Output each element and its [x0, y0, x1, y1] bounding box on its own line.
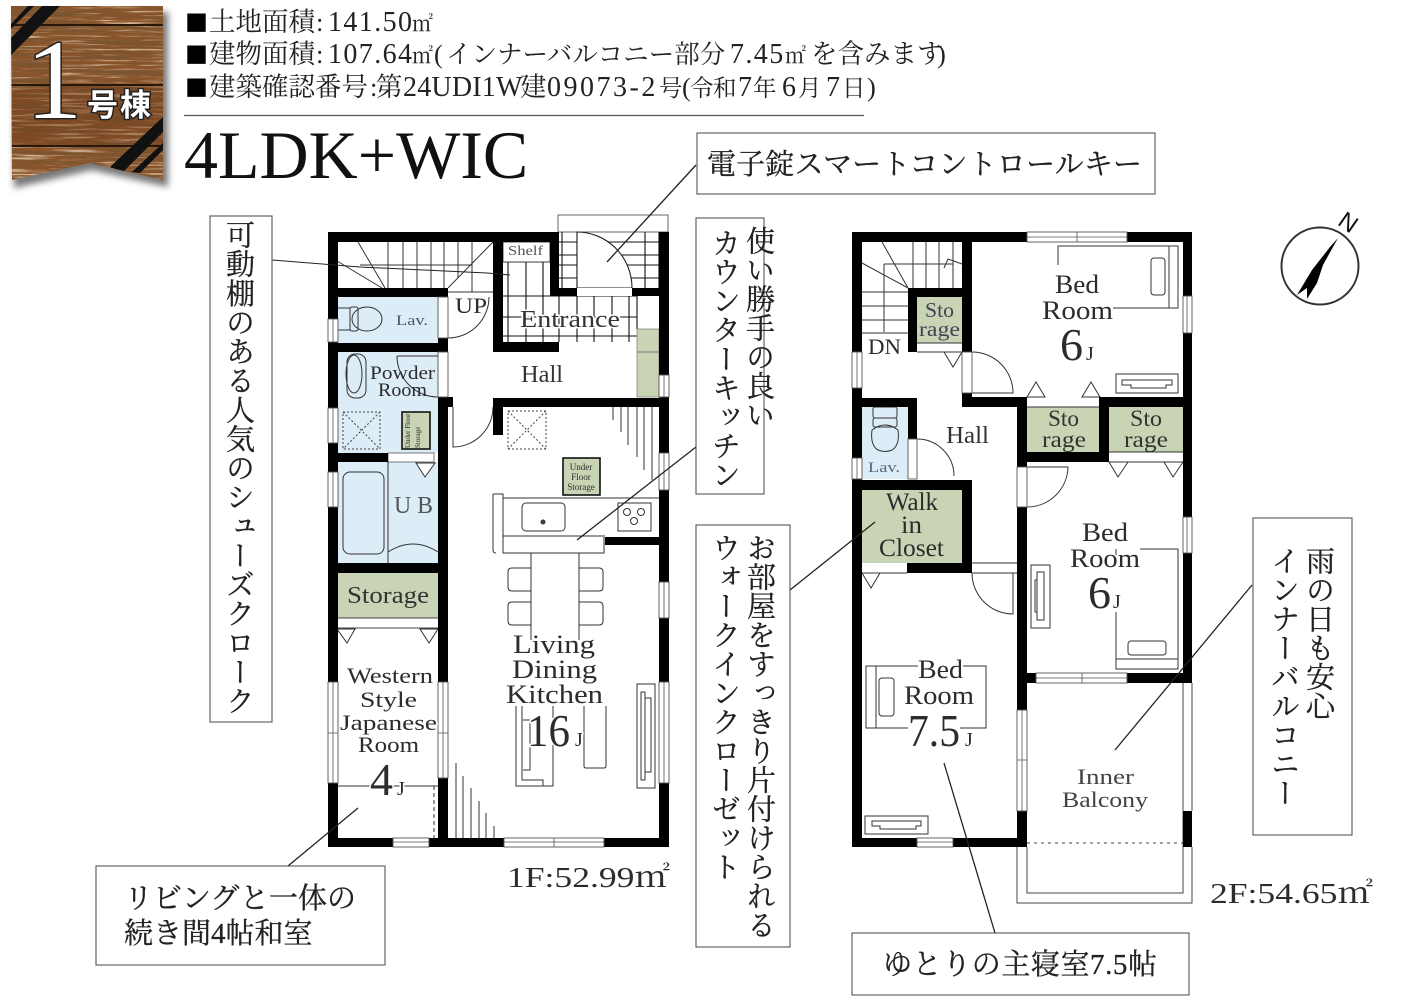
callout: smart key — [697, 133, 1155, 194]
room labels 2F — [868, 270, 1168, 812]
property facts: 令 — [690, 75, 714, 102]
room labels 2F: rage — [919, 317, 960, 341]
property facts: : — [316, 7, 323, 37]
room labels 1F: Dining — [512, 655, 597, 684]
callout: walk-in closet — [696, 525, 790, 947]
room labels 2F: Sto — [925, 298, 954, 322]
room labels 2F: 6 — [1088, 567, 1111, 618]
property facts: を含みます — [811, 39, 944, 69]
floor area: 2F: 2F:54.65㎡ — [1210, 878, 1373, 910]
callout: counter kitchen: カウンターキッチン — [708, 228, 740, 489]
beds and tvs — [865, 246, 1178, 834]
windows — [852, 232, 1192, 847]
room labels 2F: Room — [1042, 296, 1113, 325]
property facts: : — [370, 72, 377, 102]
property facts: 7.45 — [730, 39, 785, 70]
sofa, table, tv — [516, 684, 655, 788]
room labels 2F: Balcony — [1062, 787, 1148, 812]
room labels 2F: Room — [904, 681, 974, 710]
room labels 2F: rage — [1042, 427, 1086, 452]
room labels 2F: Inner — [1077, 764, 1135, 789]
room labels 2F: J — [1113, 591, 1121, 613]
room labels 2F: J — [965, 729, 973, 751]
property facts: 第 — [376, 72, 402, 102]
property facts: 141.50 — [328, 7, 413, 38]
windows — [328, 297, 669, 847]
doors and closets — [862, 343, 1183, 614]
room labels 2F: Bed — [1055, 270, 1099, 299]
property facts: ㎡ — [412, 44, 433, 68]
room labels 1F: Room — [358, 732, 419, 757]
balcony railing — [1017, 683, 1192, 903]
callout: tatami room: リビングと一体の — [124, 882, 356, 915]
room labels 1F: J — [575, 729, 583, 751]
property facts: 6 — [782, 72, 797, 103]
room labels 2F: 6 — [1060, 319, 1083, 370]
property facts: ■ — [185, 70, 208, 103]
room labels 1F: Hall — [521, 362, 563, 388]
porch and entrance tile — [503, 215, 668, 342]
callout: walk-in closet: ウォークインクローゼット — [708, 533, 740, 881]
badge numeral: 1 — [26, 18, 82, 143]
callout: master bedroom — [852, 933, 1189, 995]
leader lines — [272, 165, 1252, 933]
room labels 1F: Powder — [370, 363, 436, 384]
room labels 2F: Lav. — [868, 460, 900, 476]
callout: walk-in closet: お部屋をすっきり片付けられる — [743, 533, 776, 939]
floor area: 1F: 1F:52.99㎡ — [507, 862, 670, 894]
room labels 2F: Walk — [886, 489, 938, 516]
room labels 2F: rage — [1124, 427, 1168, 452]
room labels 2F: in — [901, 512, 923, 539]
under floor storage: Floor — [571, 472, 591, 482]
badge label: 号棟 — [87, 88, 151, 123]
room labels 1F: Kitchen — [506, 680, 603, 709]
callout: inner balcony: インナーバルコニー — [1267, 546, 1299, 807]
property facts: 7 — [826, 72, 841, 103]
property facts: ㎡ — [412, 12, 433, 36]
under floor storage: Under — [570, 462, 592, 472]
room labels 1F: Room — [378, 380, 427, 401]
room labels 2F: J — [1086, 343, 1094, 365]
toilet — [872, 407, 898, 452]
callout: tatami room — [96, 866, 385, 965]
property facts: 土地面積 — [209, 7, 317, 37]
callout: inner balcony: 雨の日も安心 — [1302, 546, 1334, 720]
room labels 2F: Closet — [879, 535, 944, 562]
stairs — [862, 242, 962, 333]
room labels 1F: Style — [360, 687, 417, 712]
room labels 2F: 7.5 — [908, 705, 960, 756]
kitchen counter — [493, 494, 659, 553]
property facts: インナーバルコニー部分 — [446, 40, 725, 69]
room labels 1F — [340, 244, 620, 805]
under floor storage: Storage — [567, 482, 595, 492]
walls — [852, 232, 1192, 847]
room labels 2F: Bed — [918, 655, 963, 684]
room labels 1F: Lav. — [396, 313, 428, 329]
callout: shoe cloak — [210, 216, 272, 722]
title: layout type: 4LDK+WIC — [184, 117, 528, 193]
property facts: 7 — [738, 72, 753, 103]
room labels 1F: J — [397, 778, 405, 800]
room labels 2F: Bed — [1082, 518, 1128, 547]
floor plan: 1F — [328, 215, 669, 847]
stairs — [337, 242, 493, 292]
room fills — [337, 297, 438, 343]
room labels 1F: Western — [347, 663, 433, 688]
room fills — [917, 297, 962, 343]
callout: shoe cloak: 可動棚のある人気のシューズクローク — [222, 220, 254, 715]
room labels 2F: Hall — [946, 423, 989, 449]
room labels 2F: DN — [868, 334, 901, 359]
room labels 1F: Storage — [347, 583, 429, 609]
property facts: : — [316, 39, 323, 69]
property facts: 年 — [753, 75, 776, 102]
property facts: 建物面積 — [209, 39, 317, 69]
callout: tatami room: 続き間4帖和室 — [124, 917, 313, 950]
room labels 2F: Room — [1070, 544, 1140, 573]
callout: master bedroom: ゆとりの主寝室7.5帖 — [883, 948, 1157, 981]
property facts: 建築確認番号 — [209, 72, 368, 102]
floor plan: 2F — [852, 232, 1192, 903]
walls — [328, 232, 669, 847]
stair lines in LDK — [456, 407, 652, 838]
under floor storage: Storage — [414, 427, 422, 448]
property facts: ■ — [185, 5, 208, 38]
property facts: 24UDI1W — [403, 72, 523, 103]
property facts: 107.64 — [328, 39, 413, 70]
room labels 2F: Sto — [1130, 406, 1162, 431]
property facts: ( — [434, 39, 443, 69]
property facts: 号 — [659, 75, 682, 102]
property facts: 和 — [713, 75, 736, 102]
property facts — [185, 5, 946, 103]
room labels 1F: U B — [394, 493, 433, 519]
callout: smart key: 電子錠スマートコントロールキー — [707, 148, 1142, 181]
callout: counter kitchen: 使い勝手の良い — [742, 226, 774, 429]
property facts: ㎡ — [785, 44, 806, 68]
callout: counter kitchen — [696, 218, 774, 494]
room labels 1F: 16 — [527, 705, 570, 756]
doors — [337, 297, 493, 838]
room labels 1F: Shelf — [508, 244, 543, 259]
room labels 1F: Living — [513, 630, 595, 659]
room labels 1F: Japanese — [340, 710, 437, 735]
icon: compass — [1282, 207, 1363, 304]
property facts: 月 — [798, 76, 822, 102]
property facts: ( — [682, 72, 691, 102]
badge: building number 1 — [11, 6, 168, 188]
property facts: ■ — [185, 37, 208, 70]
property facts: 日 — [842, 76, 866, 102]
under floor storage — [402, 412, 600, 495]
under floor storage: Under Floor — [404, 413, 412, 448]
callout: inner balcony — [1253, 518, 1352, 835]
property facts: ) — [867, 72, 876, 102]
room labels 2F: Sto — [1048, 406, 1079, 431]
property facts: 建 — [520, 72, 546, 102]
fixtures: toilet, basin, tub — [337, 307, 438, 563]
dining set — [508, 553, 603, 640]
room labels 1F: 4 — [370, 754, 393, 805]
property facts: ) — [937, 39, 946, 69]
property facts: 09073-2 — [547, 72, 658, 103]
room labels 1F: Entrance — [520, 307, 620, 333]
room labels 1F: UP — [455, 293, 487, 318]
vents — [343, 411, 546, 449]
icon: compass: N — [1333, 207, 1363, 239]
